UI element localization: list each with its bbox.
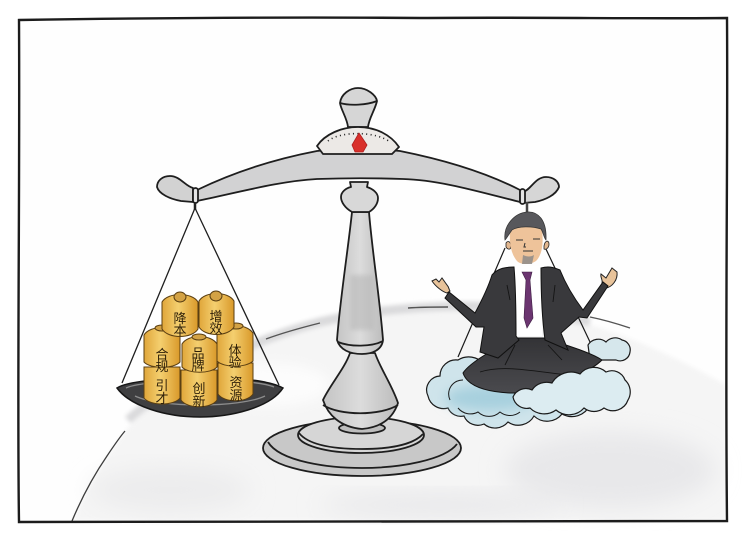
weight: 增效: 增	[209, 309, 223, 324]
weight: 引才	[144, 367, 180, 406]
weight: 创新: 新	[192, 394, 206, 409]
scale: left pan with strings	[117, 203, 283, 417]
weight: 降本: 降	[173, 311, 187, 326]
scale base: lower disc	[263, 420, 461, 476]
pan highlight	[126, 380, 274, 405]
weight: 降本	[162, 292, 198, 338]
scale: collar	[339, 422, 385, 434]
weight: 引才: 才	[155, 391, 169, 406]
face	[510, 225, 543, 264]
scale: bulb	[323, 353, 398, 429]
weight: 创新	[181, 370, 217, 409]
icon: red pointer	[352, 133, 367, 152]
weight: 创新: 创	[192, 381, 206, 396]
legs	[463, 338, 602, 393]
eyes and mouth	[516, 239, 540, 251]
left hand	[432, 278, 450, 293]
scale: beam	[197, 149, 520, 202]
neck ring	[526, 202, 528, 212]
scale base: upper disc rim	[299, 433, 423, 449]
weight: 合规: 规	[155, 359, 169, 374]
cloud upper right	[588, 338, 630, 361]
shirt	[515, 266, 542, 336]
hook	[194, 203, 196, 210]
weight: 资源: 源	[229, 388, 243, 403]
jacket left	[445, 267, 519, 358]
cloud wash	[445, 385, 535, 411]
ground: grey washed hill	[72, 306, 726, 521]
scale: dial	[317, 127, 399, 154]
weight: 增效: 效	[209, 321, 223, 336]
weight: 资源	[218, 363, 253, 403]
ears	[506, 241, 549, 249]
tie	[522, 272, 533, 328]
weight: 资源: 资	[229, 375, 243, 390]
scale: left ring	[193, 188, 198, 203]
weight: 体验: 体	[228, 343, 242, 358]
weight: 体验	[217, 323, 253, 370]
cloud inner line	[449, 380, 520, 416]
scale: right ring	[520, 189, 525, 204]
scale: bulb band	[323, 405, 398, 413]
lapel line	[480, 285, 578, 376]
man: meditating figure on cloud	[427, 202, 630, 428]
scale base: upper disc	[298, 417, 424, 453]
scale: finial rim	[340, 101, 377, 105]
weight: 合规: 合	[155, 347, 169, 362]
right hand	[601, 268, 617, 288]
goatee	[522, 255, 534, 264]
weight: 降本: 本	[173, 323, 187, 338]
weight: 合规	[144, 325, 180, 374]
scale: right beam knob	[523, 177, 559, 203]
scale: column	[337, 212, 383, 354]
pan strings	[122, 208, 279, 385]
weights: stack of gold cylinders	[144, 291, 253, 409]
weight: 体验: 验	[228, 355, 242, 370]
ropes	[458, 247, 590, 357]
scale: stand and beam	[157, 88, 559, 476]
scale: left beam knob	[157, 176, 193, 202]
scale: neck sphere	[341, 182, 378, 212]
scale base: lower disc rim	[268, 442, 457, 468]
pan dish	[117, 377, 283, 417]
weight: 增效	[199, 291, 234, 336]
weight: 引才: 引	[155, 378, 169, 393]
weight: 品牌	[182, 334, 217, 373]
jacket right	[541, 267, 608, 350]
cloud back	[427, 357, 590, 428]
scale: column band	[338, 341, 383, 346]
hair	[505, 212, 546, 240]
weight: 品牌: 品	[191, 346, 205, 361]
cloud front	[513, 367, 630, 415]
weight: 品牌: 牌	[191, 358, 205, 373]
scale: finial	[340, 88, 377, 127]
scale: dial ticks	[328, 134, 390, 142]
